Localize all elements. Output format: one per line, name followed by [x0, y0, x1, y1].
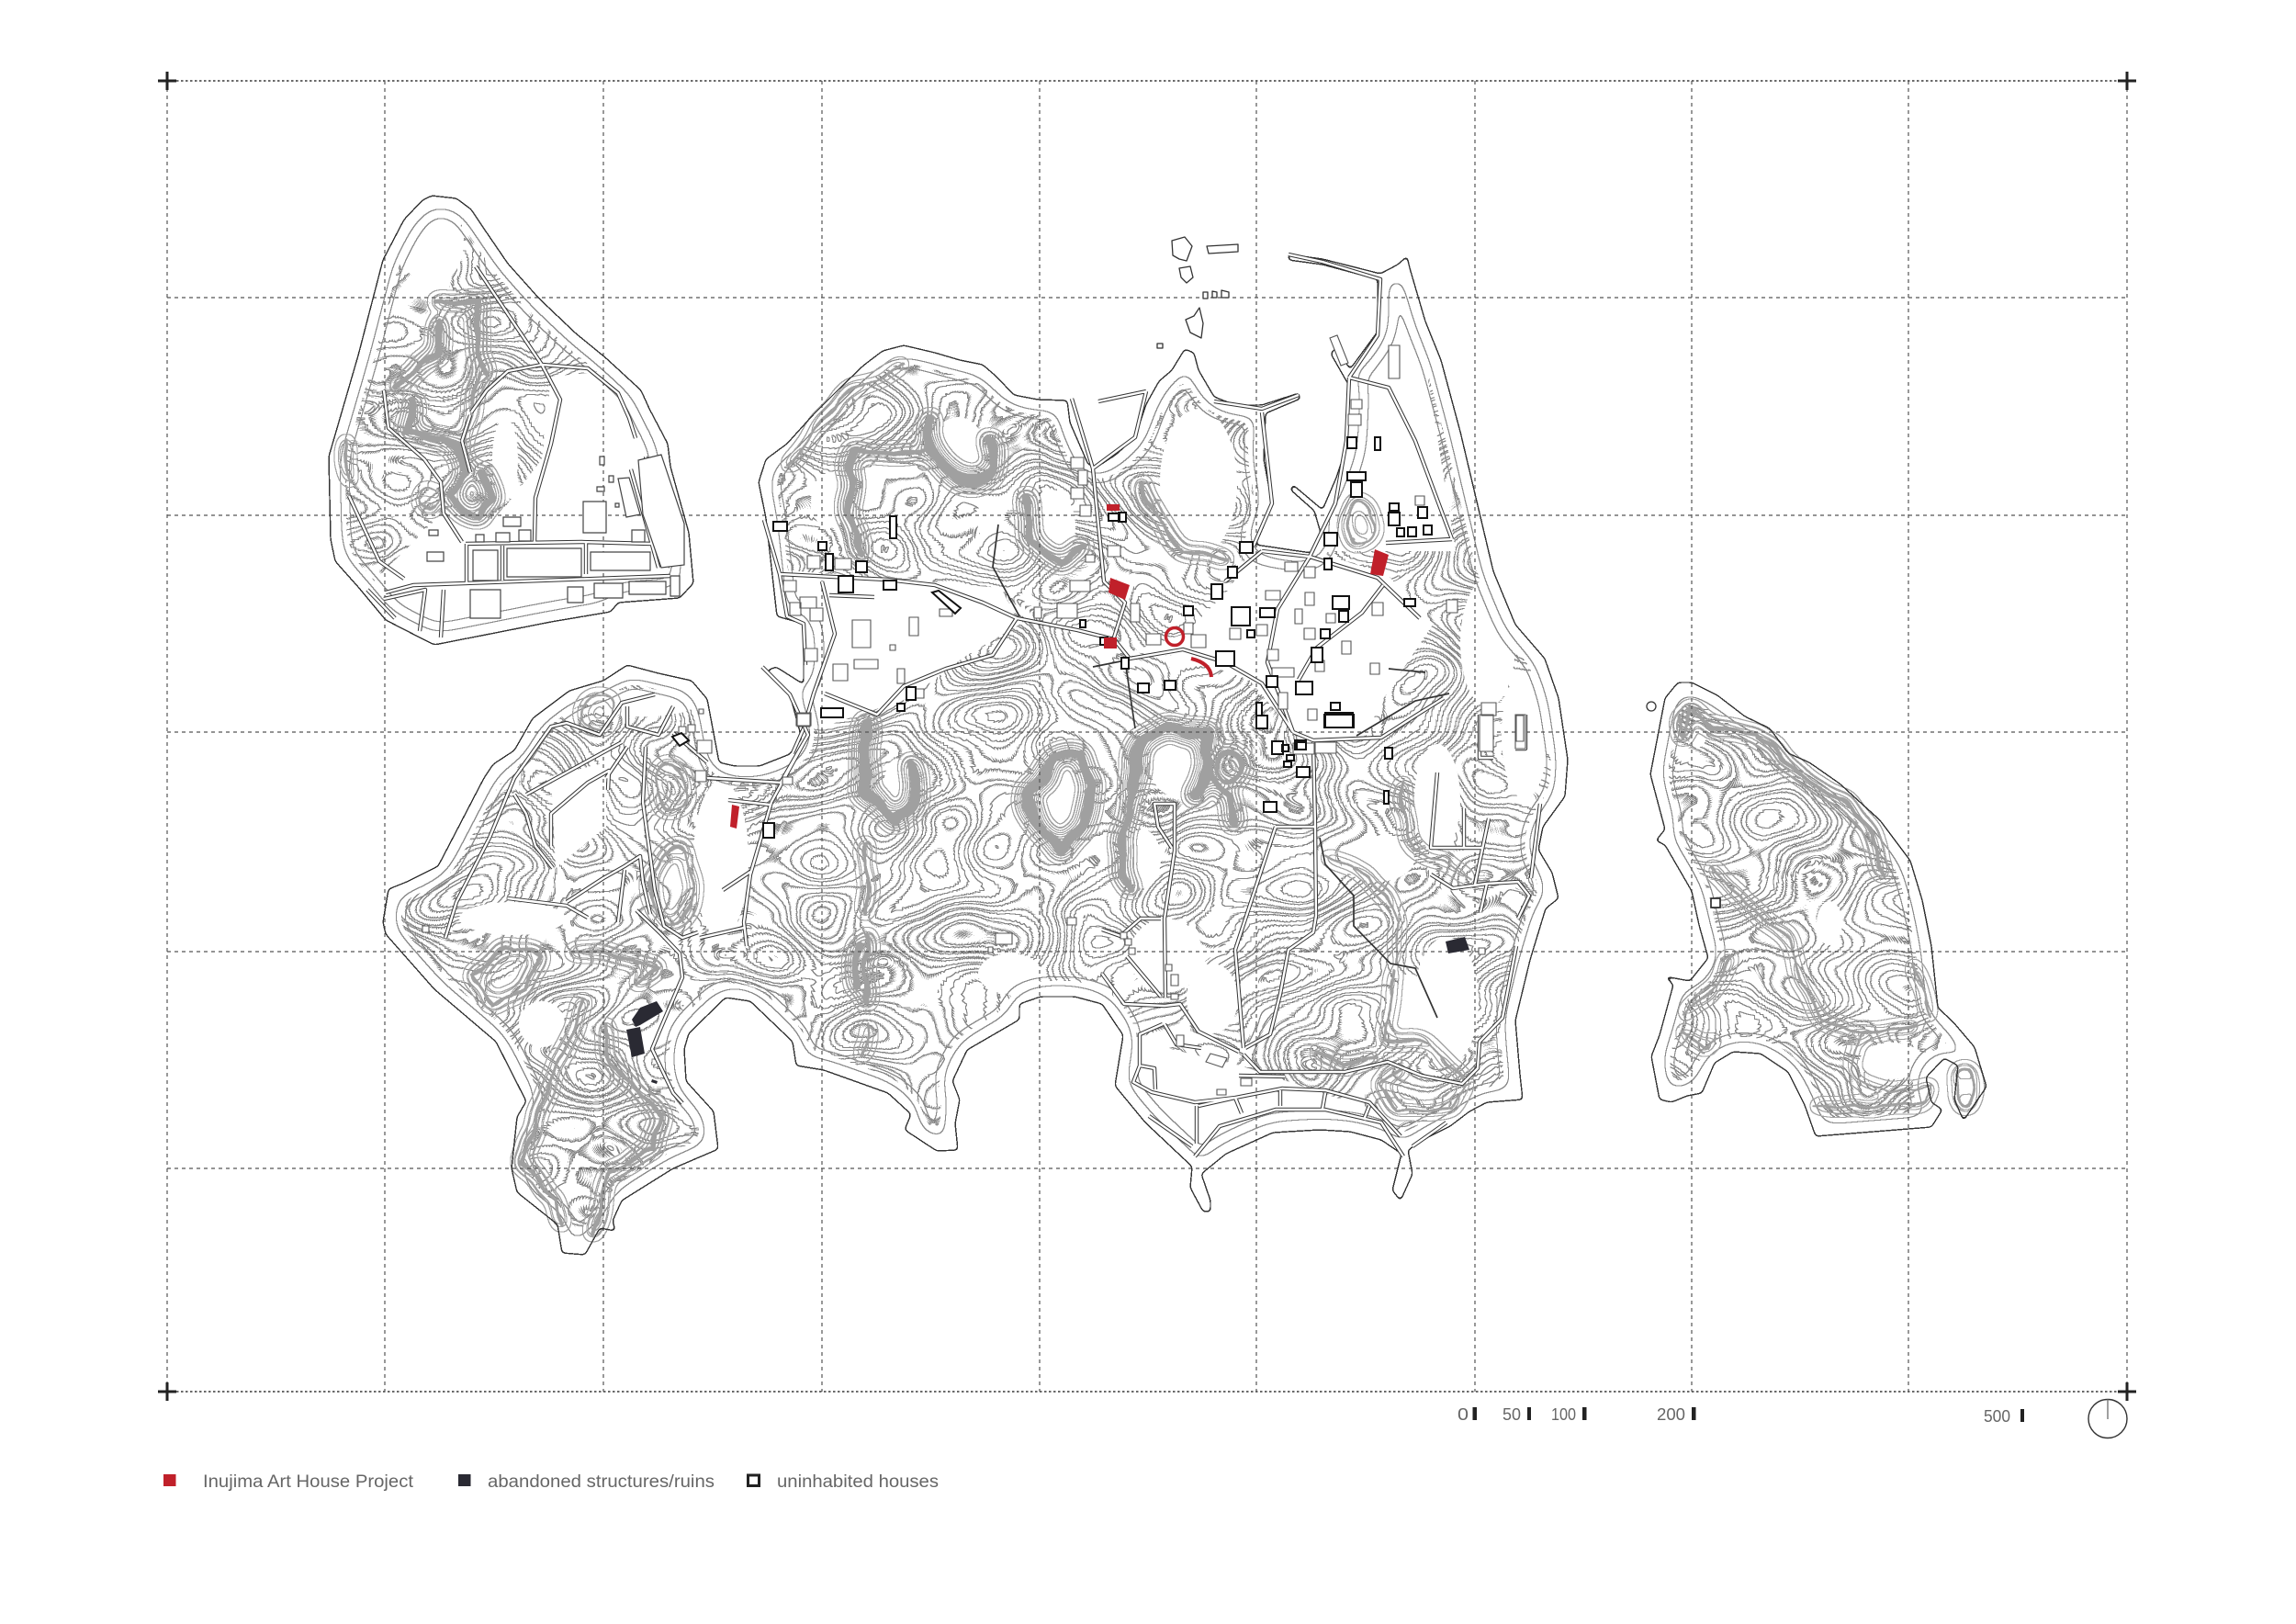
scale labels: 500	[1984, 1407, 2010, 1426]
northwest roads	[349, 266, 670, 637]
uninhabited houses	[672, 437, 1432, 838]
art house curved wall	[1191, 659, 1211, 677]
scale labels: 50	[1503, 1405, 1521, 1424]
scale labels: 0	[1458, 1405, 1469, 1424]
east coastline	[1650, 682, 1986, 1136]
east island hut	[1711, 898, 1720, 908]
scale labels: 100	[1551, 1405, 1576, 1424]
island: northwest island	[329, 196, 693, 645]
steep ridge bands	[346, 301, 1975, 1233]
map grid	[167, 81, 2127, 1392]
other houses	[422, 335, 1525, 1095]
island: east island	[1647, 682, 1986, 1136]
scale bar	[1458, 1405, 2024, 1426]
legend	[163, 1472, 939, 1492]
legend: Inujima Art House Project: Inujima Art House Project	[203, 1472, 414, 1492]
islets to the north	[1157, 237, 1238, 348]
legend: uninhabited houses: uninhabited houses	[777, 1472, 939, 1492]
art house ring	[1166, 628, 1183, 645]
abandoned structures	[626, 937, 1469, 1084]
legend: abandoned structures: abandoned structures/ruins	[488, 1472, 715, 1492]
scale labels: 200	[1657, 1405, 1685, 1424]
corner registration marks	[158, 72, 2136, 1401]
northwest coastline	[329, 196, 693, 645]
southwest roads	[445, 667, 808, 1103]
shoreline-parallel contours	[329, 196, 1986, 1255]
art house project sites in red	[730, 504, 1389, 829]
scale labels	[1458, 1405, 2010, 1426]
northwest buildings	[427, 455, 684, 618]
main roads	[764, 254, 1540, 1156]
scale ticks	[1473, 1407, 2024, 1422]
north arrow	[2088, 1400, 2127, 1438]
main coastline	[383, 254, 1568, 1255]
east islet	[1647, 702, 1656, 711]
island: main island and southwest peninsula	[383, 254, 1568, 1255]
contour texture on hills	[345, 224, 1946, 1227]
footpaths	[993, 524, 1449, 1018]
